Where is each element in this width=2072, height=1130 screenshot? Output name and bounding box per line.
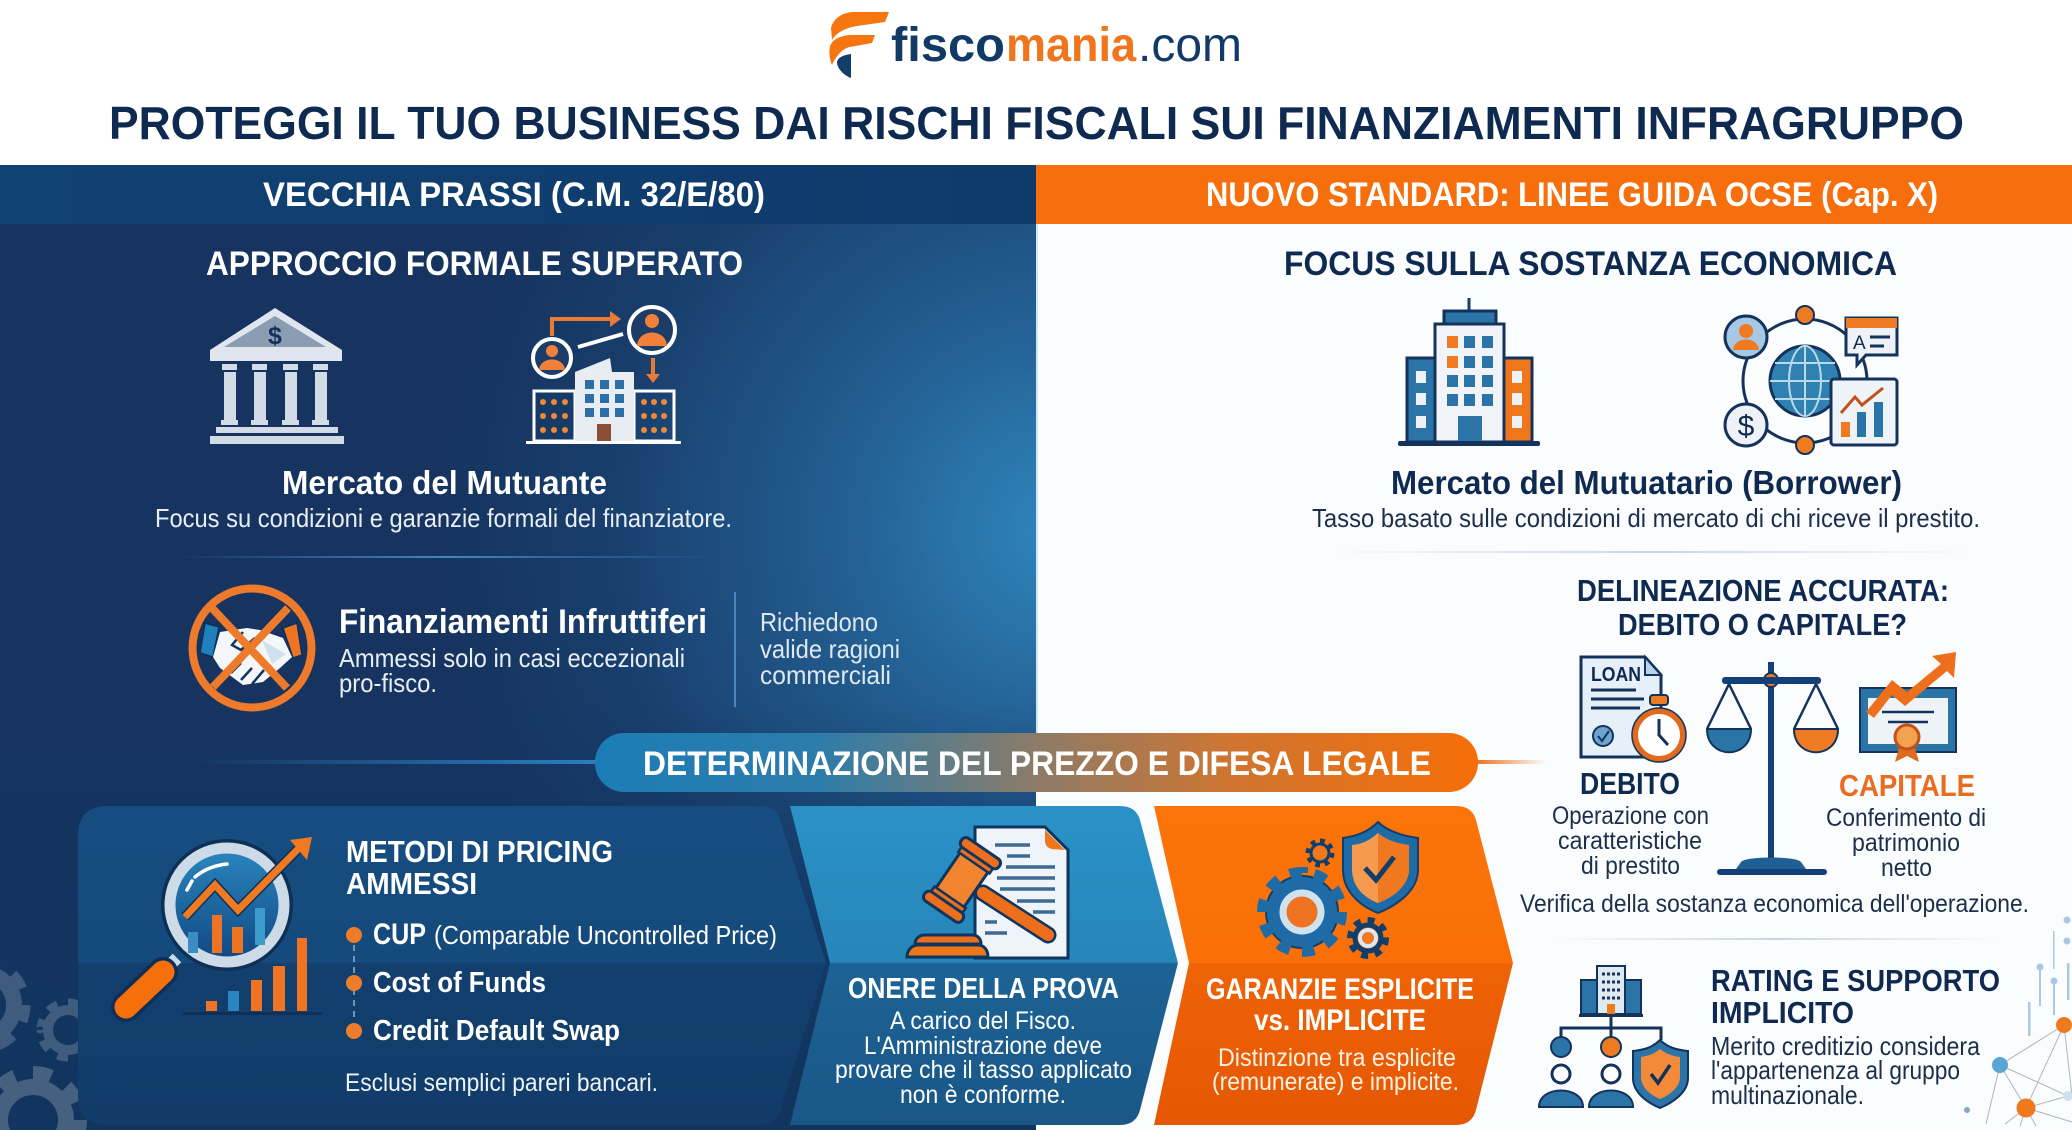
icon: bank	[210, 308, 344, 444]
icon: gears and shield	[1263, 822, 1418, 956]
logo	[829, 12, 1242, 78]
icon: global network: A	[1853, 333, 1866, 354]
icon: group company	[526, 307, 681, 444]
text: esclusi: Esclusi semplici pareri bancari.	[345, 1069, 658, 1097]
icon: capital certificate	[1860, 652, 1956, 762]
text: ammessi solo: pro-fisco.	[339, 668, 437, 698]
list: pricing methods: (Comparable Uncontrolled Price)	[434, 920, 777, 950]
header: vecchia prassi: VECCHIA PRASSI (C.M. 32/E/80)	[263, 176, 765, 214]
panel: garanzie	[1154, 806, 1513, 1125]
header: nuovo standard	[1036, 165, 2072, 224]
icon: loan document: LOAN	[1591, 664, 1641, 686]
text: distinzione	[1212, 1044, 1459, 1096]
text: capitale: patrimonio	[1852, 829, 1960, 857]
panel: delineazione accurata	[1520, 573, 2029, 918]
text: distinzione: Distinzione tra esplicite	[1218, 1044, 1456, 1072]
heading: focus sulla sostanza: FOCUS SULLA SOSTANZA ECONOMICA	[1284, 245, 1897, 283]
icon: global network: $	[1738, 410, 1755, 443]
text: distinzione: (remunerate) e implicite.	[1212, 1068, 1459, 1096]
text: capitale: Conferimento di	[1826, 804, 1986, 832]
header: vecchia prassi	[0, 165, 1036, 224]
title: PROTEGGI IL TUO BUSINESS DAI RISCHI FISCALI SUI FINANZIAMENTI INFRAGRUPPO	[109, 97, 1964, 149]
panel: approccio formale	[155, 245, 743, 533]
heading: approccio formale superato: APPROCCIO FORMALE SUPERATO	[206, 245, 743, 283]
icon: group rating	[1539, 966, 1688, 1108]
text: ammessi solo	[339, 643, 685, 698]
text: ammessi solo: Ammessi solo in casi eccezionali	[339, 643, 685, 673]
icon: office building	[1398, 298, 1540, 446]
heading: metodi di pricing: AMMESSI	[346, 866, 477, 901]
text: a carico del fisco: non è conforme.	[900, 1081, 1066, 1109]
text: focus su condizioni: Focus su condizioni e garanzie formali del finanziatore.	[155, 503, 732, 533]
banner: determinazione del prezzo	[595, 733, 1478, 792]
header: nuovo standard: NUOVO STANDARD: LINEE GUIDA OCSE (Cap. X)	[1206, 176, 1938, 214]
text: a carico del fisco: L'Amministrazione deve	[864, 1032, 1102, 1060]
heading: delineazione	[1577, 573, 1949, 642]
text: debito: caratteristiche	[1558, 827, 1702, 855]
banner: determinazione del prezzo: DETERMINAZIONE DEL PREZZO E DIFESA LEGALE	[643, 745, 1431, 783]
list: pricing methods: Credit Default Swap	[373, 1015, 620, 1047]
text: a carico del fisco: provare che il tasso applicato	[835, 1056, 1132, 1084]
logo: mania	[1006, 19, 1136, 72]
text: merito creditizio: Merito creditizio considera	[1711, 1031, 1980, 1061]
decorative gears	[0, 961, 96, 1130]
icon: magnifier chart	[126, 837, 322, 1015]
text: richiedono valide ragioni: commerciali	[760, 660, 891, 690]
decorative network corner	[1964, 916, 2072, 1126]
heading: delineazione: DEBITO O CAPITALE?	[1618, 607, 1907, 642]
panel: finanziamenti infruttiferi	[192, 588, 900, 708]
heading: garanzie esplicite	[1206, 973, 1474, 1037]
text: merito creditizio	[1711, 1031, 1980, 1110]
line right of banner	[1476, 760, 1546, 764]
heading: garanzie esplicite: vs. IMPLICITE	[1254, 1004, 1426, 1037]
text: a carico del fisco	[835, 1007, 1132, 1109]
panel: rating e supporto	[1539, 963, 2000, 1110]
list: pricing methods: CUP	[373, 918, 426, 951]
heading: onere della prova: ONERE DELLA PROVA	[848, 973, 1119, 1005]
text: a carico del fisco: A carico del Fisco.	[890, 1007, 1076, 1035]
panel: onere della prova	[790, 806, 1178, 1125]
text: finanziamenti infruttiferi: Finanziamenti Infruttiferi	[339, 603, 707, 641]
text: richiedono valide ragioni: Richiedono	[760, 607, 878, 637]
text: richiedono valide ragioni	[760, 607, 900, 690]
text: mercato del mutuante: Mercato del Mutuante	[282, 464, 607, 501]
list: pricing methods: Cost of Funds	[373, 967, 546, 999]
text: verifica: Verifica della sostanza economica dell'operazione.	[1520, 890, 2029, 918]
heading: delineazione: DELINEAZIONE ACCURATA:	[1577, 573, 1949, 608]
list: pricing methods	[346, 918, 777, 1047]
text: capitale: netto	[1881, 854, 1932, 882]
panel: sostanza economica	[1284, 245, 1980, 533]
logo: .com	[1138, 19, 1242, 72]
icon: fiscomania F	[829, 12, 889, 78]
text: capitale	[1826, 768, 1986, 882]
panel: metodi di pricing	[78, 806, 826, 1125]
heading: rating e supporto implicito	[1711, 963, 2000, 1030]
heading: rating e supporto implicito: IMPLICITO	[1711, 995, 1854, 1030]
heading: rating e supporto implicito: RATING E SUPPORTO	[1711, 963, 2000, 998]
heading: metodi di pricing	[346, 834, 613, 901]
icon: global network	[1725, 306, 1897, 454]
logo: fisco	[891, 19, 1005, 72]
icon: no handshake	[192, 588, 312, 708]
text: tasso basato: Tasso basato sulle condizioni di mercato di chi riceve il prestito.	[1312, 503, 1980, 533]
text: merito creditizio: multinazionale.	[1711, 1080, 1864, 1110]
line left of banner	[192, 760, 597, 764]
icon: bank: $	[268, 322, 282, 350]
icon: scales	[1707, 662, 1838, 875]
text: capitale: CAPITALE	[1839, 768, 1975, 803]
icon: loan document	[1581, 657, 1686, 762]
text: debito	[1552, 766, 1709, 880]
heading: garanzie esplicite: GARANZIE ESPLICITE	[1206, 973, 1474, 1006]
text: debito: di prestito	[1581, 852, 1680, 880]
text: richiedono valide ragioni: valide ragioni	[760, 634, 900, 664]
icon: gavel and document	[907, 827, 1068, 958]
heading: metodi di pricing: METODI DI PRICING	[346, 834, 613, 869]
text: debito: Operazione con	[1552, 802, 1709, 830]
text: merito creditizio: l'appartenenza al gruppo	[1711, 1055, 1960, 1085]
text: mercato del mutuatario: Mercato del Mutuatario (Borrower)	[1391, 464, 1902, 501]
text: debito: DEBITO	[1580, 766, 1680, 801]
